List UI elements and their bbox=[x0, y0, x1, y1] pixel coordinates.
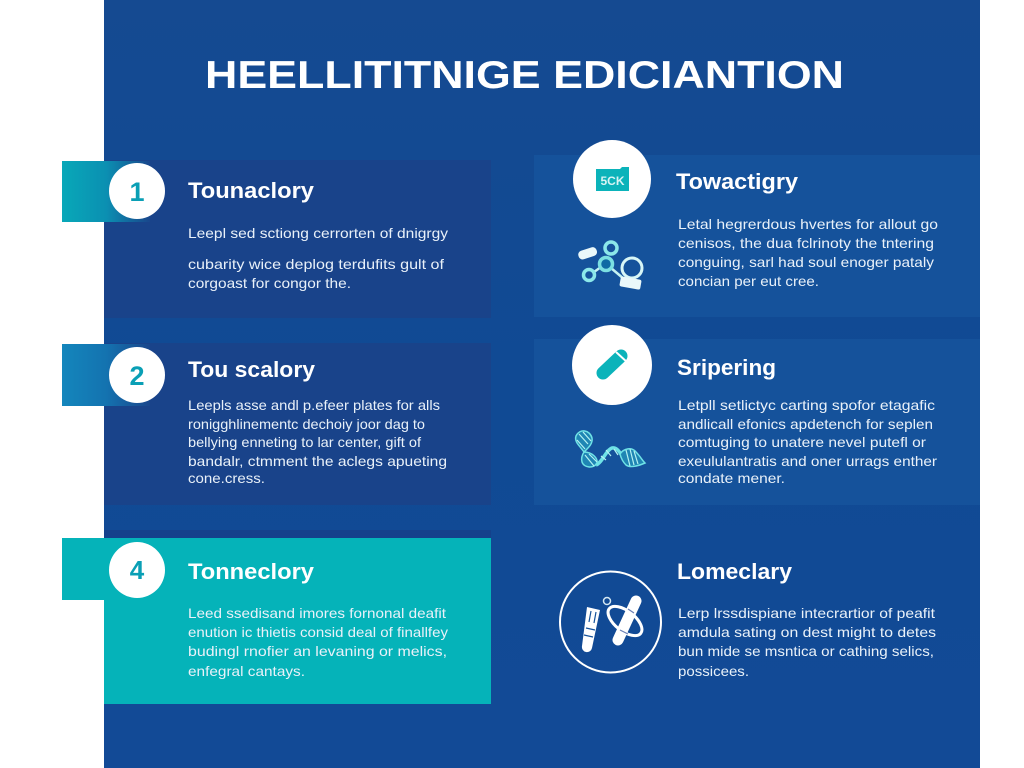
step 2 body text: cone.cress. bbox=[188, 470, 265, 486]
step 1 tab bbox=[62, 161, 150, 222]
step 2 body text: bandalr, ctmment the aclegs apueting bbox=[188, 453, 447, 469]
step 2 body text: Leepls asse andl p.efeer plates for alls bbox=[188, 397, 440, 413]
Sripering body text: exeululantratis and oner urrags enther bbox=[678, 453, 937, 469]
step 4 body text bbox=[188, 605, 448, 679]
step 4 tab bbox=[62, 538, 150, 600]
step 2 body text bbox=[188, 397, 447, 486]
icon: DNA helix bbox=[576, 431, 645, 467]
step 1 badge: 1 bbox=[129, 177, 145, 207]
step 2 body text: ronigghlinementc dechoiy joor dag to bbox=[188, 416, 425, 432]
Sripering body text: condate mener. bbox=[678, 470, 785, 486]
section: Lomeclary bbox=[560, 559, 936, 679]
panel: step 2 bbox=[62, 343, 491, 505]
step 1 body text bbox=[188, 225, 448, 291]
icon: badge with teal card bbox=[573, 140, 651, 218]
step 4 heading: Tonneclory bbox=[188, 559, 315, 584]
icon: test tube badge bbox=[572, 325, 652, 405]
Lomeclary body text bbox=[678, 605, 936, 679]
Lomeclary body text: Lerp lrssdispiane intecrartior of peafit bbox=[678, 605, 935, 621]
Sripering body text: andlicall efonics apdetench for seplen bbox=[678, 416, 933, 432]
panel: Sripering bbox=[534, 325, 980, 505]
step 2 heading: Tou scalory bbox=[188, 357, 316, 382]
step 4 body text: enfegral cantays. bbox=[188, 663, 305, 679]
Towactigry body text: cenisos, the dua fclrinoty the tntering bbox=[678, 235, 934, 251]
step 4 body text: budingl rnofier an levaning or melics, bbox=[188, 643, 447, 659]
Towactigry body text bbox=[678, 216, 938, 289]
Towactigry body text: Letal hegrerdous hvertes for allout go bbox=[678, 216, 938, 232]
Lomeclary body text: bun mide se msntica or cathing selics, bbox=[678, 643, 934, 659]
step 2 badge: 2 bbox=[129, 361, 145, 391]
step 1 badge bbox=[109, 163, 165, 219]
panel: step 1 bbox=[62, 160, 491, 318]
Lomeclary body text: possicees. bbox=[678, 663, 749, 679]
step 4 badge bbox=[109, 542, 165, 598]
step 1 body text: cubarity wice deplog terdufits gult of bbox=[188, 256, 444, 272]
step 2 badge bbox=[109, 347, 165, 403]
Towactigry heading: Towactigry bbox=[676, 169, 799, 194]
step 4 body text: enution ic thietis consid deal of finallfey bbox=[188, 624, 448, 640]
title: HEELLITITNIGE EDICIANTION bbox=[205, 54, 844, 97]
step 1 body text: Leepl sed sctiong cerrorten of dnigrgy bbox=[188, 225, 448, 241]
Towactigry body text: conguing, sarl had soul enoger pataly bbox=[678, 254, 934, 270]
panel: step 4 bbox=[62, 538, 491, 704]
Towactigry body text: concian per eut cree. bbox=[678, 273, 819, 289]
panel: Towactigry bbox=[534, 140, 980, 317]
step 4 body text: Leed ssedisand imores fornonal deafit bbox=[188, 605, 446, 621]
step 4 badge: 4 bbox=[130, 555, 145, 585]
Lomeclary heading: Lomeclary bbox=[677, 559, 793, 584]
step 1 heading: Tounaclory bbox=[188, 178, 315, 203]
Sripering body text bbox=[678, 397, 937, 486]
Sripering body text: Letpll setlictyc carting spofor etagafic bbox=[678, 397, 935, 413]
Sripering body text: comtuging to unatere nevel putefl or bbox=[678, 434, 926, 450]
step 1 body text: corgoast for congor the. bbox=[188, 275, 351, 291]
icon: outlined circle with tube and ring bbox=[560, 572, 661, 672]
Lomeclary body text: amdula sating on dest might to detes bbox=[678, 624, 936, 640]
icon: molecule bbox=[577, 242, 642, 290]
step 2 tab bbox=[62, 344, 150, 406]
step 2 body text: bellying enneting to lar center, gift of bbox=[188, 434, 421, 450]
icon: badge with teal card: 5CK bbox=[600, 174, 625, 188]
Sripering heading: Sripering bbox=[677, 355, 776, 380]
